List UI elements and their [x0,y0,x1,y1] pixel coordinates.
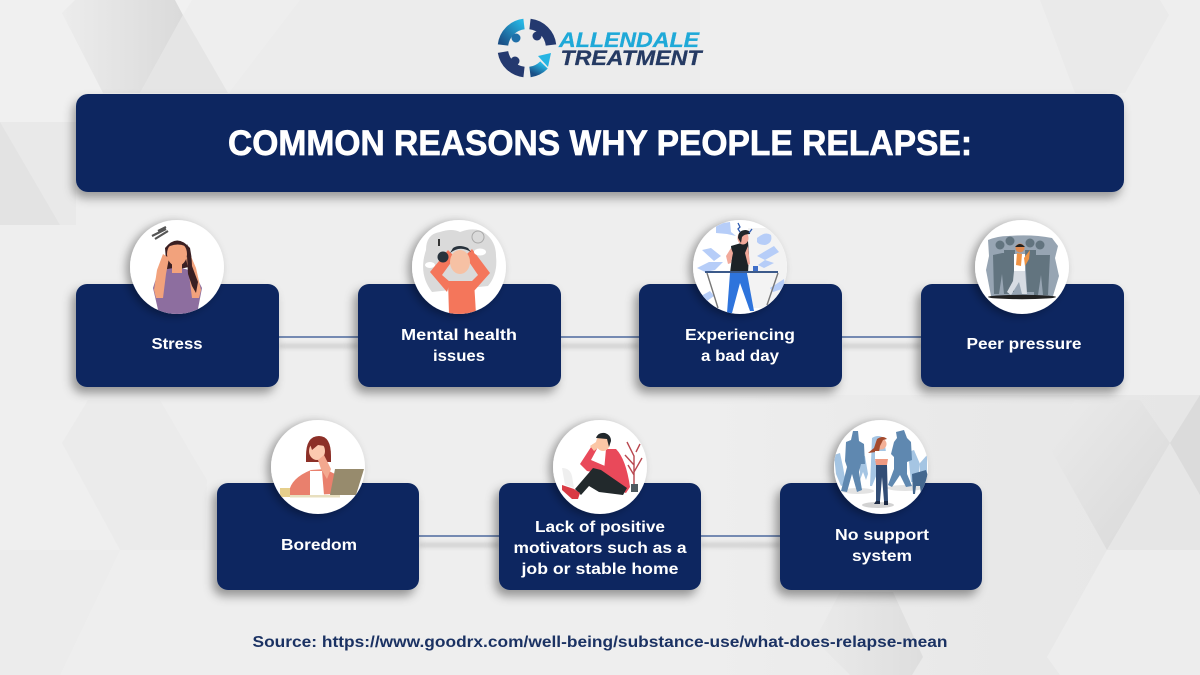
card: boredom: Boredom [281,537,357,554]
card: experiencing a bad day: Experiencing [685,327,795,344]
card: peer pressure: Peer pressure [966,336,1082,353]
card: no support system: system [852,548,912,565]
card: no support system: No support [835,527,929,544]
icon: woman at desk with flying papers [693,220,788,314]
card: mental health issues: issues [433,348,485,365]
source: Source: https://www.goodrx.com/well-being/substance-use/what-does-relapse-mean [252,634,948,651]
icon: man sitting head in hand [553,420,647,514]
card: lack of positive motivators: Lack of positive [535,519,665,536]
logo wordmark: ALLENDALE [558,29,700,52]
logo wordmark [558,29,704,70]
card: mental health issues [358,220,561,387]
connector lines [279,337,921,545]
card: peer pressure [921,220,1124,387]
card: lack of positive motivators: job or stable home [520,561,679,578]
card: lack of positive motivators [499,420,701,590]
title: COMMON REASONS WHY PEOPLE RELAPSE: [228,124,972,163]
logo [503,24,704,72]
card: experiencing a bad day [639,220,842,387]
card: lack of positive motivators: motivators such as a [514,540,687,557]
icon: overwhelmed person [412,220,506,314]
card: stress [76,220,279,387]
icon: woman alone with silhouettes [834,420,928,514]
icon: stressed woman [130,220,224,314]
logo wordmark: TREATMENT [560,47,704,70]
icon: bored woman at laptop [271,420,365,514]
card: boredom [217,420,419,590]
icon: person surrounded by crowd [975,220,1069,314]
card: no support system [780,420,982,590]
title banner [76,94,1124,192]
card: mental health issues: Mental health [401,327,517,344]
card: stress: Stress [152,336,202,353]
logo mark [503,24,551,72]
card: experiencing a bad day: a bad day [701,348,779,365]
